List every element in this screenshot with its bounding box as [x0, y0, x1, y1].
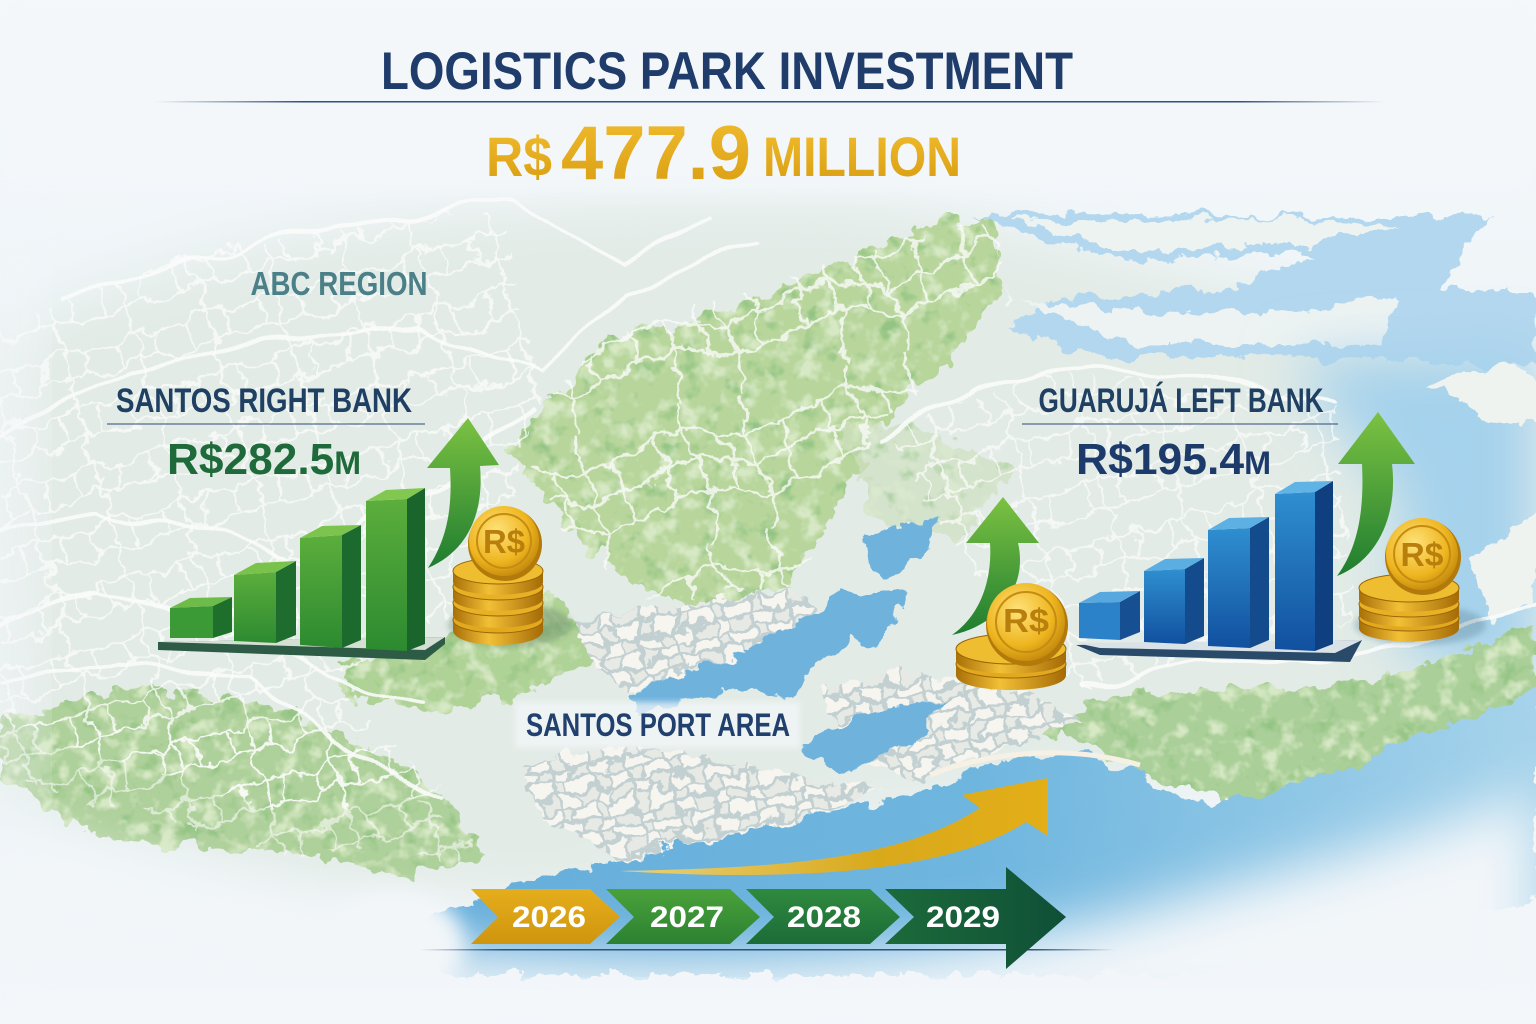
arrow: green up centre [952, 497, 1039, 635]
timeline arrow head and band [885, 867, 1066, 969]
total amount [486, 111, 961, 196]
map: small right forest patch [830, 420, 1010, 540]
map: lower mesh [0, 720, 490, 860]
map label: ABC region: ABC REGION [250, 265, 428, 302]
timeline 2026 to 2029 [420, 867, 1115, 969]
bar chart: green [158, 488, 445, 660]
arrow: green up right [1337, 412, 1415, 576]
map: bottom band [0, 985, 1536, 1024]
map: lower-left forest [0, 690, 490, 875]
map: central forest [510, 218, 1005, 615]
arrow: green up [427, 418, 499, 568]
map: upper right water [975, 212, 1536, 365]
value: R$195.4M: R$195.4M [1076, 435, 1271, 484]
map label: Santos port area [515, 702, 800, 748]
total amount: MILLION [763, 125, 961, 188]
step: 2026: 2026 [512, 901, 586, 934]
map: fading veil top [0, 0, 1536, 190]
map: city road mesh right [880, 370, 1350, 690]
step: 2027: 2027 [650, 901, 724, 934]
total amount: R$ [486, 125, 552, 188]
panel: Santos right bank [107, 382, 572, 660]
map: city road mesh left [0, 210, 540, 820]
map: fading veil bottom [0, 790, 1536, 1024]
title: LOGISTICS PARK INVESTMENT [381, 42, 1073, 101]
title rule [155, 101, 1385, 102]
value: R$282.5M: R$282.5M [167, 435, 361, 484]
icon: coin stack centre: R$ [1003, 602, 1049, 639]
step: 2029: 2029 [926, 901, 1000, 934]
icon: coin stack [448, 506, 572, 647]
map: fading sea tip [325, 890, 465, 1000]
total amount: 477.9 [561, 111, 751, 196]
map: right coast islands [1430, 362, 1536, 620]
panel: Guarujá left bank [1022, 382, 1486, 662]
map: main roads [0, 205, 1536, 800]
map: left mid forest [335, 590, 595, 712]
icon: coin stack right: R$ [1400, 536, 1444, 573]
map: coastal beach line [930, 753, 1140, 775]
map: lower sea [420, 690, 1536, 975]
step: 2028: 2028 [787, 901, 861, 934]
icon: coin stack: R$ [483, 523, 525, 560]
heading: Guarujá left bank: GUARUJÁ LEFT BANK [1038, 382, 1324, 420]
bar chart: blue [1076, 481, 1362, 662]
panel: centre coins and arrow [952, 497, 1068, 690]
map: right sky-blue wash [1290, 350, 1536, 690]
map: city blocks [520, 590, 1080, 860]
step: 2027 [606, 889, 760, 944]
map label: Santos port area: SANTOS PORT AREA [526, 707, 790, 743]
arrow: gold growth curve [620, 778, 1048, 875]
map: land base [0, 202, 1536, 900]
step: 2028 [746, 889, 900, 944]
icon: coin stack centre [956, 583, 1068, 690]
heading: Santos right bank: SANTOS RIGHT BANK [116, 382, 412, 420]
map: fading veil left [0, 200, 40, 850]
map: lower-right forest [1040, 625, 1536, 805]
map: mesh of roads [510, 220, 1010, 600]
step: 2026 [471, 889, 620, 944]
icon: coin stack right [1354, 518, 1486, 645]
map: port channels [630, 520, 950, 775]
